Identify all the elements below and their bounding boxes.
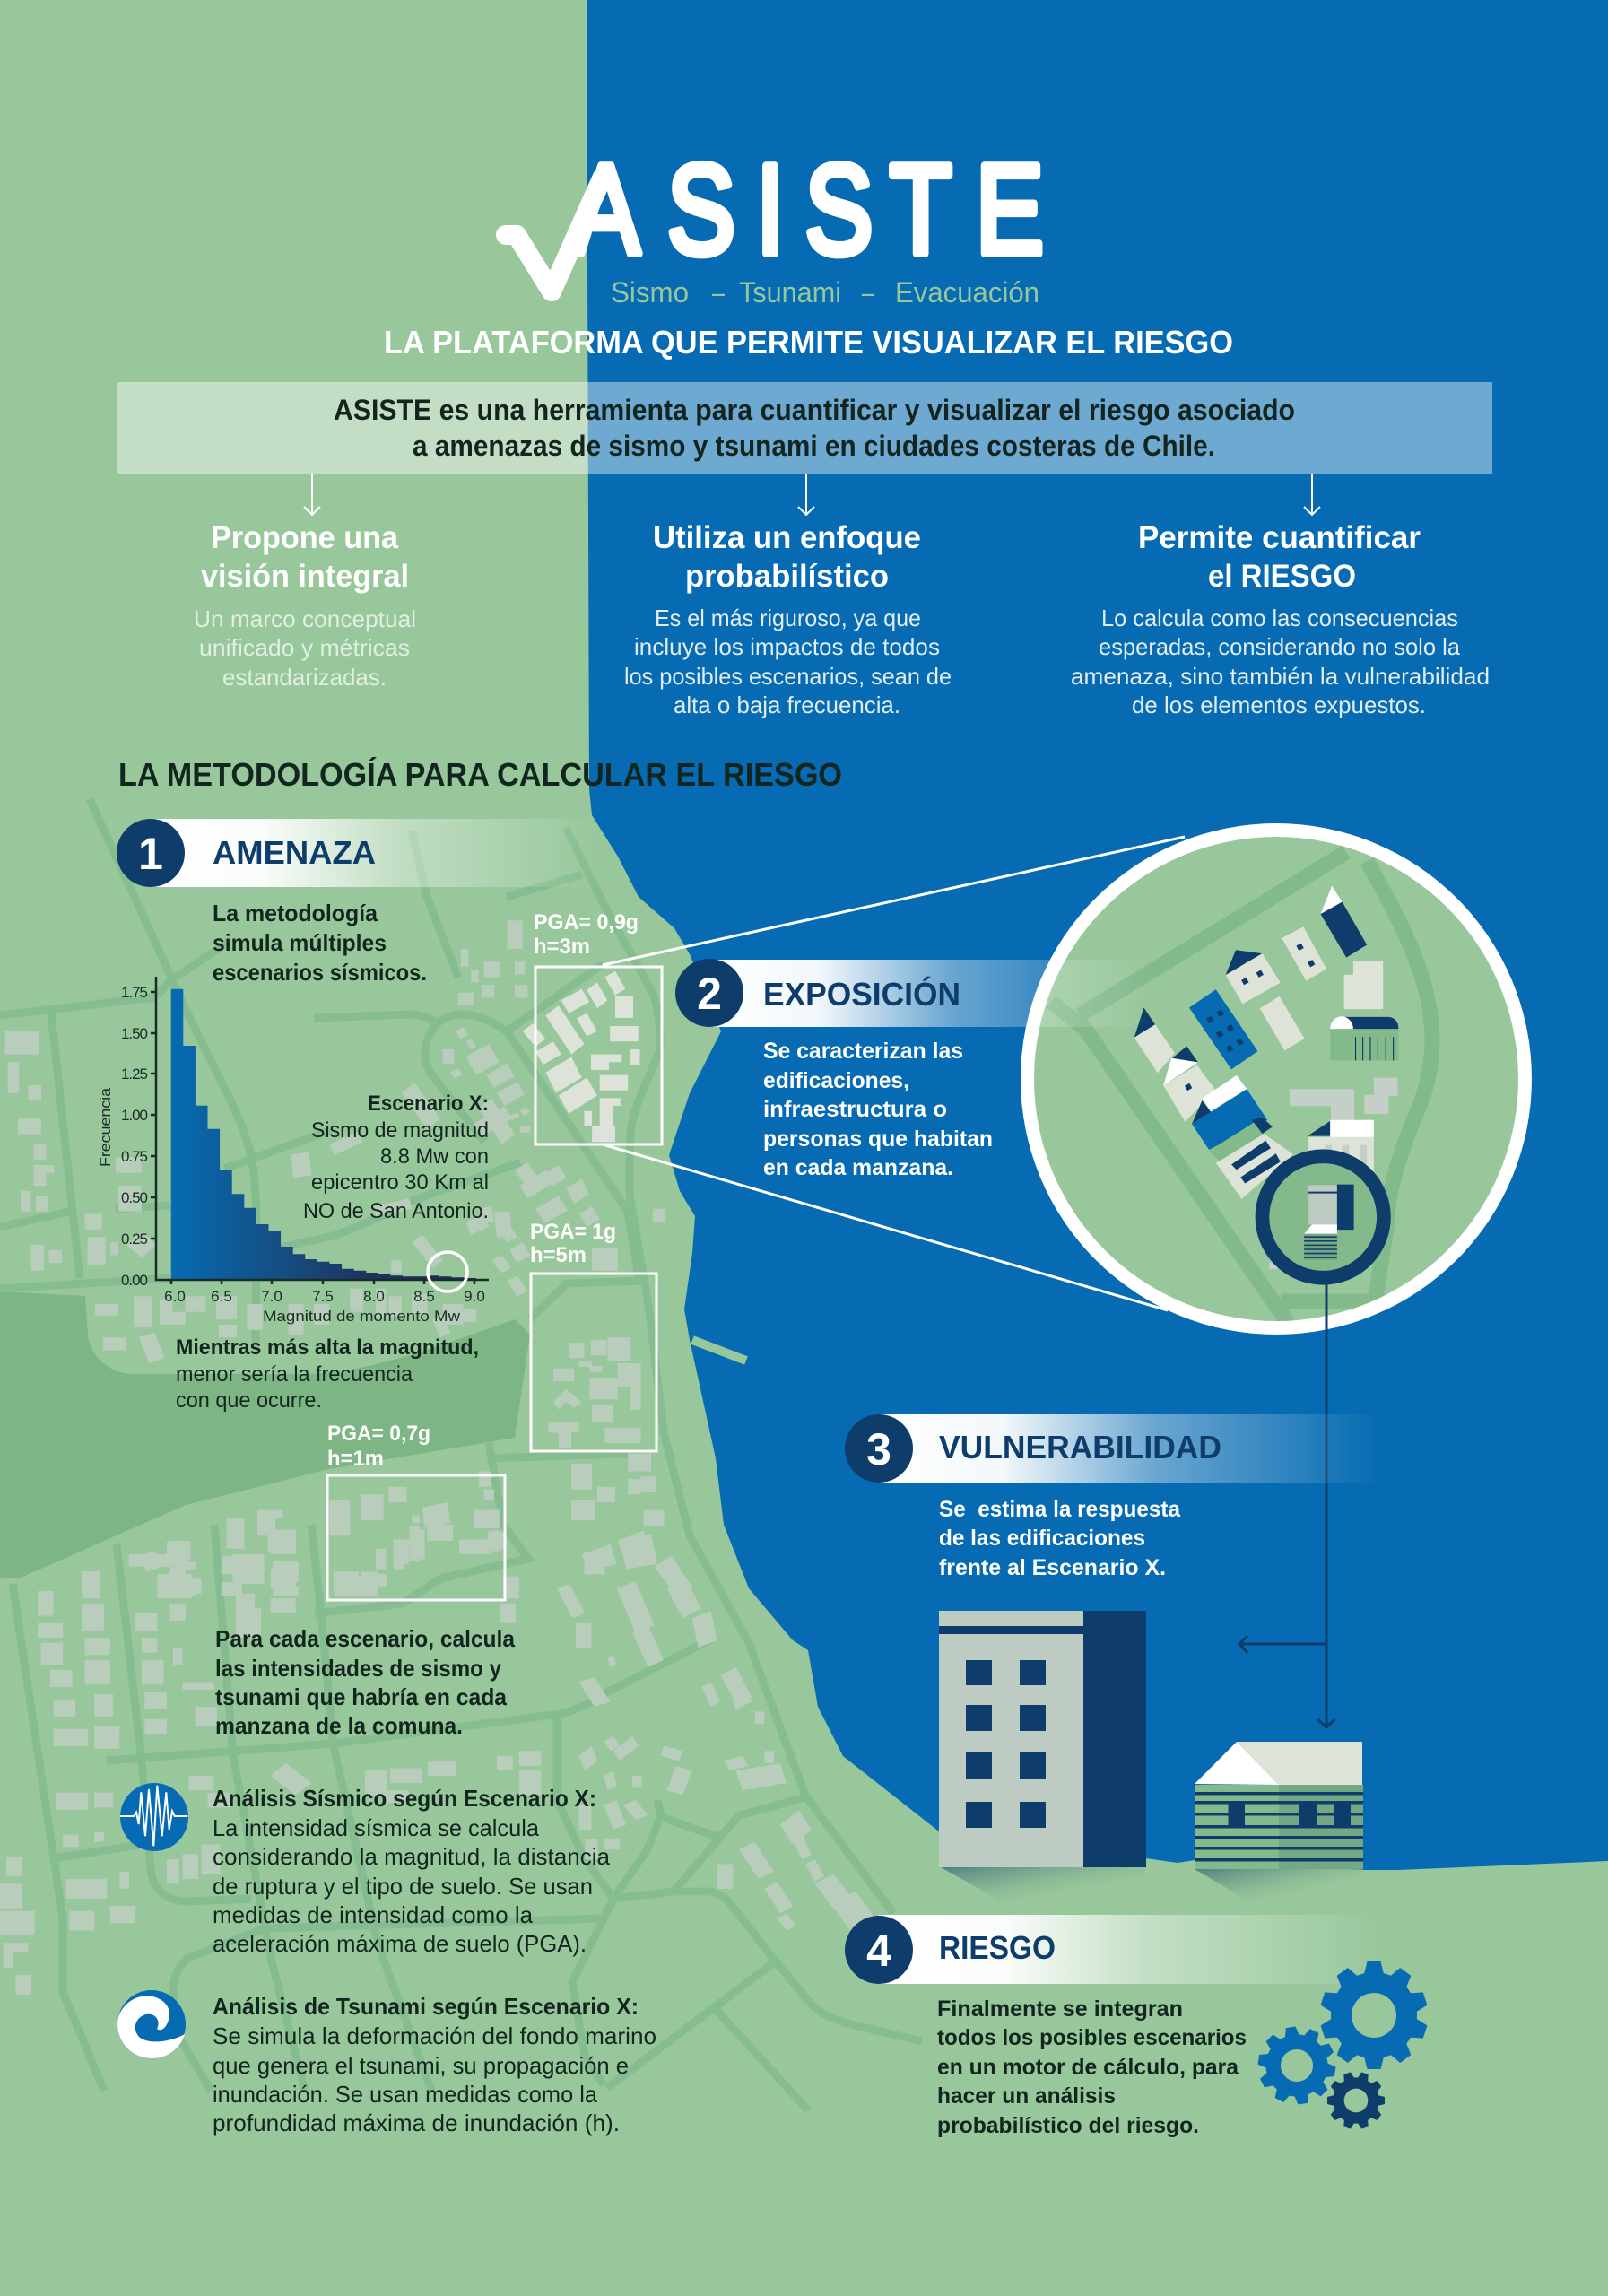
seismic analysis text: de ruptura y el tipo de suelo. Se usan <box>213 1873 593 1900</box>
tsunami analysis text: Análisis de Tsunami según Escenario X: <box>213 1993 639 2020</box>
step 2 text: personas que habitan <box>763 1126 993 1152</box>
column: Utiliza un enfoque probabilístico: los posibles escenarios, sean de <box>624 663 952 690</box>
magnified roads <box>1051 852 1432 1323</box>
logo wordmark: ASISTE <box>572 140 1044 281</box>
sea <box>587 0 1608 1870</box>
scenario X callout: Sismo de magnitud <box>311 1118 489 1143</box>
x axis labels <box>164 1288 485 1305</box>
intro band: a amenazas de sismo y tsunami en ciudades costeras de Chile. <box>413 430 1215 462</box>
step 3 header: VULNERABILIDAD: 3 <box>866 1424 891 1474</box>
column: Utiliza un enfoque probabilístico: Utiliza un enfoque <box>653 520 921 555</box>
column: Permite cuantificar el RIESGO: el RIESGO <box>1208 559 1356 594</box>
tsunami analysis text: inundación. Se usan medidas como la <box>213 2081 598 2108</box>
step 4 text: probabilístico del riesgo. <box>937 2113 1199 2138</box>
connector line with arrows to vulnerability figures <box>1239 1283 1334 1727</box>
axes <box>151 977 489 1284</box>
zone box: PGA 0,7g h=1m: PGA= 0,7g <box>327 1422 430 1446</box>
tsunami analysis text: Se simula la deformación del fondo marino <box>213 2022 656 2049</box>
column: Propone una visión integral: unificado y métricas <box>199 634 410 661</box>
column: Permite cuantificar el RIESGO: de los elementos expuestos. <box>1132 691 1426 718</box>
map: highlighted buildings in zone 1 <box>523 971 639 1142</box>
seismic analysis text: La intensidad sísmica se calcula <box>213 1814 540 1841</box>
icon: tall building <box>939 1611 1146 1910</box>
x axis labels: 7.5 <box>312 1288 334 1305</box>
column: Permite cuantificar el RIESGO: amenaza, sino también la vulnerabilidad <box>1071 663 1490 690</box>
zone box: PGA 0,7g h=1m <box>327 1422 505 1600</box>
zone box: PGA 0,9g h=3m <box>534 910 662 1144</box>
step 1 intro text: simula múltiples <box>213 929 387 956</box>
map: building footprints, upper area <box>5 920 687 1596</box>
step 3 header: VULNERABILIDAD: VULNERABILIDAD <box>939 1429 1221 1465</box>
step 1 header: AMENAZA: AMENAZA <box>213 834 376 871</box>
arrows under the band <box>304 474 1320 515</box>
step 1 header: AMENAZA <box>117 819 599 887</box>
column: Propone una visión integral: visión integral <box>201 559 409 594</box>
column: Permite cuantificar el RIESGO: Permite cuantificar <box>1138 520 1421 555</box>
scenario X callout <box>303 1091 489 1223</box>
logo tagline: – <box>712 276 725 309</box>
scenario X callout: NO de San Antonio. <box>303 1199 489 1223</box>
step 4 text: Finalmente se integran <box>937 1996 1183 2022</box>
map: road network <box>0 799 922 2110</box>
y axis labels <box>121 984 148 1289</box>
scenario X marker <box>428 1252 467 1292</box>
x axis labels: 8.0 <box>363 1288 385 1305</box>
pier <box>692 1340 746 1361</box>
seismic analysis text <box>213 1785 611 1957</box>
step 1 intro text: La metodología <box>213 900 378 926</box>
x axis labels: 7.0 <box>261 1288 282 1305</box>
step 4 text: hacer un análisis <box>937 2083 1116 2109</box>
step 4 text: todos los posibles escenarios <box>937 2025 1247 2050</box>
tsunami analysis text: profundidad máxima de inundación (h). <box>213 2109 620 2136</box>
column: Utiliza un enfoque probabilístico <box>624 520 952 718</box>
column: Propone una visión integral: Un marco conceptual <box>194 605 416 632</box>
logo tagline: Tsunami <box>739 276 841 309</box>
zone box: PGA 0,7g h=1m: h=1m <box>327 1447 384 1471</box>
logo: ASISTE <box>506 140 1044 309</box>
chart note: menor sería la frecuencia <box>176 1362 413 1387</box>
column: Propone una visión integral <box>194 520 416 691</box>
column: Utiliza un enfoque probabilístico: probabilístico <box>685 559 889 594</box>
magnifier ring <box>1262 1156 1384 1278</box>
logo tagline: – <box>862 276 874 309</box>
y axis labels: 0.25 <box>121 1231 148 1248</box>
step 1 detail text: manzana de la comuna. <box>215 1712 463 1739</box>
step 2 text: Se caracterizan las <box>763 1039 963 1064</box>
logo tagline: Sismo <box>611 276 689 309</box>
zone box: PGA 1g h=5m: h=5m <box>530 1243 587 1267</box>
logo mark: check stroke <box>506 177 603 291</box>
y axis title: Frecuencia <box>97 1087 114 1167</box>
x axis labels: 8.5 <box>413 1288 435 1305</box>
y axis labels: 1.75 <box>121 984 148 1001</box>
y axis labels: 1.00 <box>121 1107 148 1124</box>
step 4 text: en un motor de cálculo, para <box>937 2055 1239 2080</box>
step 1 header: AMENAZA: 1 <box>138 829 163 879</box>
step 3 text: de las edificaciones <box>939 1526 1145 1551</box>
column: Utiliza un enfoque probabilístico: alta o baja frecuencia. <box>674 691 900 718</box>
y axis labels: 1.50 <box>121 1025 148 1042</box>
step 2 header: EXPOSICIÓN <box>675 959 1149 1027</box>
step 1 intro text <box>213 900 427 986</box>
step 1 detail text: Para cada escenario, calcula <box>215 1625 515 1652</box>
column: Propone una visión integral: estandarizadas. <box>222 664 387 691</box>
step 4 text <box>937 1996 1247 2138</box>
x axis labels: 9.0 <box>464 1288 485 1305</box>
step 2 text <box>763 1039 993 1180</box>
chart note <box>176 1335 479 1413</box>
seismic analysis text: considerando la magnitud, la distancia <box>213 1843 611 1870</box>
logo tagline: Evacuación <box>895 276 1039 309</box>
step 4 header: RIESGO: 4 <box>866 1926 891 1976</box>
zone box: PGA 0,9g h=3m: PGA= 0,9g <box>534 910 639 935</box>
column: Propone una visión integral: Propone una <box>211 520 399 555</box>
logo tagline <box>611 276 1039 309</box>
histogram bars <box>171 989 476 1280</box>
seismic analysis text: medidas de intensidad como la <box>213 1901 534 1928</box>
column: Permite cuantificar el RIESGO: esperadas, considerando no solo la <box>1099 633 1461 660</box>
step 1 detail text: tsunami que habría en cada <box>215 1683 508 1710</box>
scenario X callout: epicentro 30 Km al <box>311 1170 489 1195</box>
seismic analysis text: aceleración máxima de suelo (PGA). <box>213 1930 587 1957</box>
y axis labels: 0.75 <box>121 1148 148 1165</box>
methodology heading: LA METODOLOGÍA PARA CALCULAR EL RIESGO <box>118 756 842 793</box>
scenario X callout: Escenario X: <box>368 1091 489 1116</box>
bar chart: frequency vs magnitude <box>97 977 489 1325</box>
zone box: PGA 0,9g h=3m: h=3m <box>534 935 590 959</box>
zone box: PGA 1g h=5m: PGA= 1g <box>530 1220 616 1244</box>
step 1 detail text <box>215 1625 515 1739</box>
tsunami analysis text <box>213 1993 656 2136</box>
main title: LA PLATAFORMA QUE PERMITE VISUALIZAR EL RIESGO <box>384 324 1233 361</box>
y axis labels: 0.50 <box>121 1189 148 1206</box>
x axis labels: 6.5 <box>211 1288 232 1305</box>
step 3 text <box>939 1497 1181 1580</box>
column: Permite cuantificar el RIESGO <box>1071 520 1490 718</box>
step 2 text: edificaciones, <box>763 1068 909 1093</box>
magnified buildings <box>1134 886 1398 1278</box>
intro text: ASISTE es una herramienta para cuantificar y visualizar el riesgo asociado <box>334 394 1295 426</box>
map: dark green park area <box>0 1292 530 1578</box>
step 2 text: en cada manzana. <box>763 1155 953 1180</box>
y axis labels: 1.25 <box>121 1065 148 1083</box>
magnified block illustration <box>1021 823 1532 1335</box>
step 3 text: Se estima la respuesta <box>939 1497 1181 1522</box>
x axis title: Magnitud de momento Mw <box>263 1308 461 1325</box>
x axis labels: 6.0 <box>164 1288 186 1305</box>
icon: tsunami wave <box>117 1990 186 2058</box>
step 2 text: infraestructura o <box>763 1097 947 1122</box>
step 1 detail text: las intensidades de sismo y <box>215 1655 501 1682</box>
step 4 header: RIESGO <box>845 1915 1381 1984</box>
step 3 header: VULNERABILIDAD <box>845 1414 1381 1483</box>
chart note: con que ocurre. <box>176 1388 322 1413</box>
chart note: Mientras más alta la magnitud, <box>176 1335 479 1360</box>
y axis labels: 0.00 <box>121 1272 148 1289</box>
icon: low house <box>1195 1742 1363 1910</box>
column: Utiliza un enfoque probabilístico: Es el más riguroso, ya que <box>655 604 921 631</box>
column: Permite cuantificar el RIESGO: Lo calcula como las consecuencias <box>1101 604 1458 631</box>
zone box: PGA 1g h=5m <box>530 1220 656 1451</box>
tsunami analysis text: que genera el tsunami, su propagación e <box>213 2052 629 2079</box>
step 1 intro text: escenarios sísmicos. <box>213 959 427 986</box>
step 4 header: RIESGO: RIESGO <box>939 1929 1056 1966</box>
column: Utiliza un enfoque probabilístico: incluye los impactos de todos <box>634 633 940 660</box>
icon: gears <box>1252 1961 1428 2136</box>
intro band <box>117 382 1492 474</box>
seismic analysis text: Análisis Sísmico según Escenario X: <box>213 1785 596 1812</box>
step 3 text: frente al Escenario X. <box>939 1555 1166 1580</box>
scenario X callout: 8.8 Mw con <box>380 1144 489 1169</box>
map: building footprints, lower area <box>0 1525 881 1995</box>
zoom connector lines <box>603 837 1185 1310</box>
step 2 header: EXPOSICIÓN: 2 <box>697 969 722 1019</box>
step 2 header: EXPOSICIÓN: EXPOSICIÓN <box>763 975 960 1013</box>
icon: seismic wave <box>120 1783 188 1851</box>
